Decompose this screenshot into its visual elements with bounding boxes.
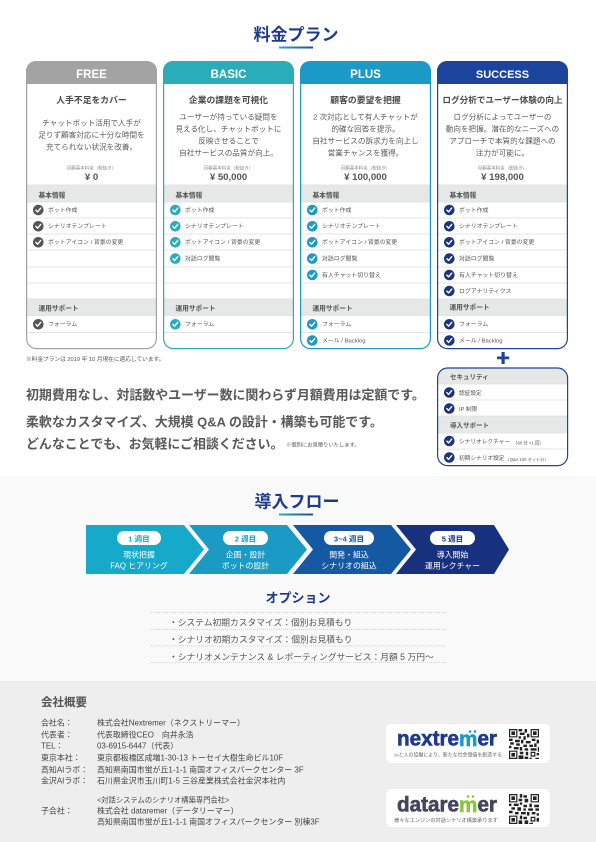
panel: PLUS plan: シナリオテンプレート [322, 223, 381, 230]
logo card: dataremer: 様々なエンジンの対話シナリオ構築承ります [394, 816, 498, 824]
text block: company details: 金沢AIラボ： [41, 775, 88, 785]
plan description [312, 111, 419, 157]
step: week 5: 運用レクチャー [425, 560, 480, 570]
panel: FREE plan: 基本情報 [38, 190, 66, 199]
list: options [151, 612, 446, 662]
panel: BASIC plan: 対話ログ閲覧 [185, 254, 220, 262]
panel: PLUS plan: フォーラム [322, 321, 351, 328]
panel: PLUS plan: ボットアイコン / 背景の変更 [322, 238, 397, 246]
text block: company details: 高知県南国市蛍が丘1-1-1 南国オフィスパークセンター 別棟3F [97, 816, 320, 826]
panel: BASIC plan: ボットアイコン / 背景の変更 [185, 238, 260, 246]
panel: BASIC plan: BASIC [211, 69, 246, 81]
panel: add-on options [438, 368, 568, 466]
step: week 2: 2 週目 [235, 533, 256, 543]
panel: add-on options: IP 制限 [459, 405, 478, 413]
text block: company details: 高知AIラボ： [41, 764, 88, 774]
text block: company details: 株式会社 dataremer（データリーマー） [97, 805, 239, 815]
panel: add-on options: 初期シナリオ設定（Q&A 100 セット分） [459, 454, 549, 462]
logo card: nextremer [386, 724, 550, 763]
logo card: dataremer [386, 789, 550, 827]
step: week 2 [189, 525, 307, 574]
panel: PLUS plan: メール / Backlog [322, 338, 366, 344]
heading: options: オプション [265, 590, 331, 605]
panel: PLUS plan: PLUS [350, 69, 381, 81]
panel: SUCCESS plan [437, 61, 568, 349]
panel: add-on options: シナリオレクチャー （90 分 ×1 回） [459, 438, 544, 446]
text block: company details: 子会社： [41, 805, 73, 815]
plan price [341, 164, 390, 183]
plan description [446, 111, 559, 157]
step: weeks 3 to 4: 開発・組込 [329, 549, 369, 559]
plan price: 月額基本料金（税抜き） [204, 164, 253, 171]
step: week 5: 導入開始 [437, 549, 468, 559]
plan description: ログ分析によってユーザーの [454, 111, 551, 121]
step: weeks 3 to 4 [293, 525, 411, 574]
panel: BASIC plan: シナリオテンプレート [185, 223, 244, 230]
panel: FREE plan: ボット作成 [48, 206, 78, 214]
text block: fixed monthly fee message: どんなことでも、お気軽にご相談ください。 [26, 436, 283, 451]
text block: company details: <対話システムのシナリオ構築専門会社> [97, 795, 229, 804]
panel: BASIC plan: 基本情報 [176, 190, 203, 199]
panel: FREE plan: 人手不足をカバー [56, 94, 127, 105]
panel: PLUS plan: 有人チャット切り替え [322, 271, 381, 279]
text block: company details: TEL： [41, 741, 64, 750]
panel: BASIC plan: フォーラム [185, 321, 214, 328]
icon: plus sign [497, 352, 509, 364]
plan description: 注力が可能に。 [476, 147, 529, 157]
panel: FREE plan: シナリオテンプレート [48, 223, 107, 230]
plan description: 見える化し、チャットボットに [175, 124, 282, 133]
panel: PLUS plan: 運用サポート [312, 303, 353, 312]
panel: SUCCESS plan: シナリオテンプレート [459, 223, 518, 230]
logo: dataremer: dataremer [397, 793, 497, 816]
step: week 2: ボットの設計 [222, 560, 269, 570]
text block: company details: 03-6915-6447（代表） [97, 740, 178, 750]
step: week 1: 現状把握 [123, 549, 155, 559]
footnote: plan date: ※料金プランは 2019 年 10 月現在に適応しています。 [26, 355, 164, 363]
panel: PLUS plan [300, 61, 431, 349]
panel: SUCCESS plan: ログアナリティクス [459, 287, 511, 295]
plan price [67, 164, 116, 183]
step: week 1: 1 週目 [128, 533, 150, 543]
panel: BASIC plan [163, 61, 294, 349]
text block: company details: 高知県南国市蛍が丘1-1-1 南国オフィスパークセンター 3F [97, 764, 304, 774]
text block: company details: 代表者： [41, 729, 73, 739]
text block: company details: 石川県金沢市玉川町1-5 三谷産業株式会社金沢本社内 [97, 775, 285, 785]
panel: add-on options: セキュリティ [450, 373, 489, 381]
plan price: ¥ 198,000 [481, 172, 524, 183]
plan description: 足りず顧客対応に十分な時間を [38, 129, 145, 139]
list: options: ・シナリオメンテナンス & レポーティングサービス：月額 5 万円～ [169, 651, 434, 662]
plan description [38, 117, 145, 151]
plan description: 充てられない状況を改善。 [46, 141, 137, 151]
plan price [204, 164, 253, 183]
list: options: ・システム初期カスタマイズ：個別お見積もり [169, 616, 352, 627]
plan price: 月額基本料金（税抜き） [341, 164, 390, 171]
plan description: 自社サービスの訴求力を向上し [312, 135, 419, 145]
plan price: 月額基本料金（税抜き） [478, 164, 527, 171]
panel: BASIC plan: 企業の課題を可視化 [189, 94, 268, 105]
step: weeks 3 to 4: シナリオの組込 [321, 560, 377, 570]
heading: onboarding flow: 導入フロー [254, 492, 340, 511]
panel: SUCCESS plan: ログ分析でユーザー体験の向上 [442, 94, 563, 105]
panel: add-on options: 導入サポート [450, 420, 489, 429]
plan price: 月額基本料金（税抜き） [67, 164, 116, 171]
text block: fixed monthly fee message: 柔軟なカスタマイズ、大規模 Q&A の設計・構築も可能です。 [26, 414, 383, 429]
plan description: 営業チャンスを獲得。 [328, 147, 403, 157]
text block: fixed monthly fee message [26, 387, 425, 451]
plan price: ¥ 0 [85, 172, 98, 183]
step: week 5: 5 週目 [442, 533, 463, 543]
panel: FREE plan: 運用サポート [38, 303, 79, 312]
plan description: 2 次対応として有人チャットが [313, 111, 418, 121]
QR code [509, 794, 539, 824]
panel: FREE plan [26, 61, 157, 349]
QR code [509, 729, 539, 759]
panel: FREE plan: ボットアイコン / 背景の変更 [48, 238, 123, 246]
panel: SUCCESS plan: ボット作成 [459, 206, 489, 214]
panel: SUCCESS plan: 対話ログ閲覧 [459, 254, 494, 262]
text block: company details: 株式会社Nextremer（ネクストリーマー） [97, 717, 245, 727]
text block: company details: 東京本社： [41, 752, 81, 762]
step: week 1: FAQ ヒアリング [110, 560, 168, 570]
plan description: アプローチで本質的な課題への [449, 135, 556, 145]
logo card: nextremer: AIと人の協働により、新たな社会価値を創造する [394, 751, 502, 758]
plan description: 反映させることで [198, 135, 259, 145]
plan price: ¥ 50,000 [210, 172, 247, 183]
list: options: ・シナリオ初期カスタマイズ：個別お見積もり [169, 633, 352, 644]
panel: SUCCESS plan: SUCCESS [476, 69, 529, 81]
panel: add-on options: 認証設定 [459, 389, 482, 397]
panel: SUCCESS plan: フォーラム [459, 321, 488, 328]
panel: SUCCESS plan: 基本情報 [450, 190, 477, 199]
step: week 5 [396, 525, 509, 574]
text block: company details: 代表取締役CEO 向井永浩 [97, 729, 194, 739]
text block: company details [41, 717, 320, 826]
panel: PLUS plan: 顧客の要望を把握 [330, 94, 401, 105]
plan description: 的確な回答を提示。 [331, 123, 400, 133]
plan price [478, 164, 527, 183]
panel: SUCCESS plan: メール / Backlog [459, 338, 503, 344]
panel: FREE plan: FREE [76, 69, 107, 81]
plan price: ¥ 100,000 [344, 172, 387, 183]
text block: fixed monthly fee message: ※個別にお見積りいたします。 [286, 440, 360, 448]
text block: company details: 会社名： [41, 717, 73, 727]
panel: SUCCESS plan: ボットアイコン / 背景の変更 [459, 238, 534, 246]
text block: fixed monthly fee message: 初期費用なし、対話数やユーザー数に関わらず月額費用は定額です。 [26, 387, 425, 402]
plan description: 自社サービスの品質が向上。 [179, 147, 278, 157]
chart: onboarding chevrons [86, 525, 509, 574]
plan description: 動向を把握。潜在的なニーズへの [446, 123, 559, 133]
panel: SUCCESS plan: 有人チャット切り替え [459, 271, 518, 279]
panel: FREE plan: フォーラム [48, 321, 77, 328]
panel: PLUS plan: ボット作成 [322, 206, 352, 214]
panel: PLUS plan: 対話ログ閲覧 [322, 254, 357, 262]
panel: BASIC plan: ボット作成 [185, 206, 215, 214]
heading: pricing plans: 料金プラン [254, 24, 338, 44]
step: weeks 3 to 4: 3~4 週目 [334, 533, 364, 543]
logo: nextremer: nextremer [397, 727, 497, 750]
panel: PLUS plan: 基本情報 [312, 190, 340, 199]
plan description: チャットボット活用で人手が [42, 117, 141, 127]
panel: SUCCESS plan: 運用サポート [450, 302, 490, 311]
plan description [175, 111, 282, 157]
heading: company profile: 会社概要 [41, 695, 87, 709]
plan description: ユーザーが持っている疑問を [179, 111, 278, 121]
step: week 1 [86, 525, 204, 574]
text block: company details: 東京都板橋区成増1-30-13 トーセイ大樹生命ビル10F [97, 752, 283, 762]
step: week 2: 企画・設計 [226, 549, 265, 559]
panel: BASIC plan: 運用サポート [176, 303, 216, 312]
